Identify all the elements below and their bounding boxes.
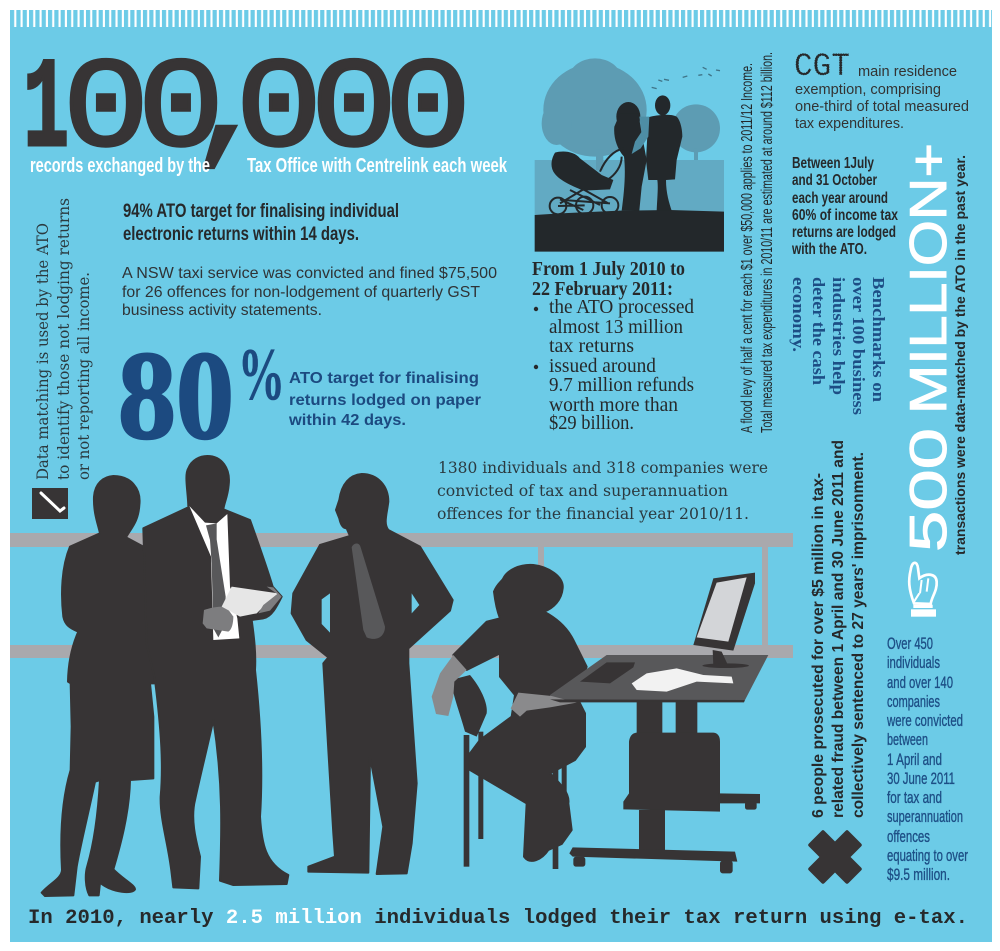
- text: 94% target: [123, 201, 399, 245]
- text: over 450 individuals: companies: [887, 692, 940, 711]
- text: over 450 individuals: Over 450: [887, 634, 933, 653]
- rotated text: benchmarks: over 100 business: [849, 277, 868, 415]
- text: NSW taxi service: for 26 offences for non-lodgement of quarterly GST: [122, 284, 480, 301]
- text: from 1 July: 22 February 2011:: [532, 278, 673, 300]
- text: over 450 individuals: for tax and: [887, 788, 942, 807]
- caption: records exchanged: [30, 155, 508, 177]
- big number: 100,000: 1: [23, 38, 69, 184]
- text: over 450 individuals: between: [887, 730, 928, 749]
- rotated text: benchmarks: economy.: [789, 277, 808, 352]
- text: CGT: exemption, comprising: [795, 81, 941, 98]
- text: over 450 individuals: $9.5 million.: [887, 865, 950, 884]
- big number: 100,000: 00,000: [63, 39, 471, 184]
- rotated text: flood levy: [739, 52, 776, 433]
- rails behind the people: [10, 533, 793, 658]
- text: between 1 July and 31 October: Between 1July: [792, 155, 874, 172]
- text: between 1 July and 31 October: with the ATO.: [791, 241, 867, 258]
- text: over 450 individuals: individuals: [887, 653, 940, 672]
- text: NSW taxi service: [122, 265, 497, 319]
- text: NSW taxi service: business activity statements.: [122, 302, 322, 319]
- illustration: family with pram: [535, 58, 724, 252]
- text: from 1 July: the ATO processed: [549, 296, 694, 318]
- rotated text: benchmarks: deter the cash: [809, 277, 828, 386]
- big number: 80%: 80: [118, 327, 234, 466]
- rotated text: transactions: transactions were data-matched by the ATO in the past year.: [953, 155, 968, 555]
- text: between 1 July and 31 October: each year around: [792, 190, 888, 207]
- rotated text: data matching: Data matching is used by the ATO: [33, 223, 52, 480]
- caption: records exchanged: Tax Office with Centrelink each week: [247, 155, 508, 177]
- text: 80% target: returns lodged on paper: [289, 392, 481, 409]
- text: 1380 individuals: [437, 458, 768, 523]
- rotated text: benchmarks: [789, 277, 888, 415]
- icon: dark box with tick: [32, 488, 68, 519]
- rotated text: 6 people prosecuted: related fraud between 1 April and 30 June 2011 and: [830, 440, 847, 818]
- text: CGT: tax expenditures.: [795, 115, 904, 132]
- text: over 450 individuals: 30 June 2011: [887, 769, 955, 788]
- text: from 1 July: worth more than: [549, 394, 678, 416]
- text: 94% target: electronic returns within 14 days.: [123, 224, 359, 245]
- rotated text: benchmarks: industries help: [829, 277, 848, 395]
- illustration: man with hands on hips: [292, 474, 453, 874]
- big rotated number: 500 million+: [900, 143, 958, 552]
- text: 94% target: 94% ATO target for finalising individual: [123, 201, 399, 222]
- illustration: seated woman at desk: [432, 565, 768, 873]
- caption: records exchanged: records exchanged by the: [30, 155, 210, 177]
- illustration: man in suit with papers: [143, 456, 288, 888]
- rotated text: 6 people prosecuted: [810, 440, 867, 818]
- big number: 80%: %: [238, 334, 285, 416]
- big rotated number: 500 million+: 500: [900, 428, 958, 552]
- rotated text: 6 people prosecuted: 6 people prosecuted for over $5 million in tax-: [810, 473, 827, 818]
- text: CGT: [794, 48, 969, 132]
- text: over 450 individuals: offences: [887, 827, 930, 846]
- text: CGT: main residence: [858, 63, 957, 80]
- icon: cross: [807, 829, 863, 885]
- illustration: standing woman: [42, 476, 157, 896]
- text: over 450 individuals: [886, 634, 968, 884]
- text: between 1 July and 31 October: 60% of income tax: [792, 207, 898, 224]
- rotated text: data matching: [33, 198, 93, 480]
- text: from 1 July: issued around: [549, 355, 656, 377]
- text: from 1 July: tax returns: [549, 335, 634, 357]
- text: 80% target: ATO target for finalising: [289, 370, 479, 387]
- rotated text: benchmarks: Benchmarks on: [869, 277, 888, 403]
- text: CGT: one-third of total measured: [795, 98, 969, 115]
- text: between 1 July and 31 October: returns are lodged: [792, 224, 896, 241]
- text: 80% target: within 42 days.: [288, 412, 406, 429]
- text: 1380 individuals: convicted of tax and superannuation: [437, 481, 728, 500]
- text: between 1 July and 31 October: [791, 155, 898, 258]
- rotated text: data matching: or not reporting all income.: [74, 272, 93, 480]
- text: between 1 July and 31 October: and 31 October: [792, 172, 877, 189]
- text: over 450 individuals: 1 April and: [887, 750, 942, 769]
- text: from 1 July: From 1 July 2010 to: [532, 258, 685, 280]
- footer line: e-tax: In 2010, nearly 2.5 million individuals lodged their tax return using e-tax.: [28, 907, 968, 930]
- text: 80% target: [288, 370, 481, 429]
- text: over 450 individuals: and over 140: [887, 673, 953, 692]
- big rotated number: 500 million+: MILLION+: [900, 143, 958, 414]
- rotated text: 6 people prosecuted: collectively sentenced to 27 years' imprisonment.: [850, 452, 867, 818]
- rotated text: data matching: to identify those not lodging returns: [54, 198, 73, 480]
- text: from 1 July: $29 billion.: [549, 412, 634, 434]
- text: NSW taxi service: A NSW taxi service was convicted and fined $75,500: [122, 265, 497, 282]
- text: from 1 July: 9.7 million refunds: [549, 374, 694, 396]
- text: 1380 individuals: offences for the financial year 2010/11.: [437, 504, 749, 523]
- text: 1380 individuals: 1380 individuals and 318 companies were: [438, 458, 768, 477]
- icon: pointing hand: [909, 563, 937, 617]
- text: over 450 individuals: were convicted: [886, 711, 963, 730]
- text: from 1 July: almost 13 million: [549, 316, 683, 338]
- text: CGT: CGT: [794, 48, 850, 85]
- text: from 1 July: [532, 258, 694, 434]
